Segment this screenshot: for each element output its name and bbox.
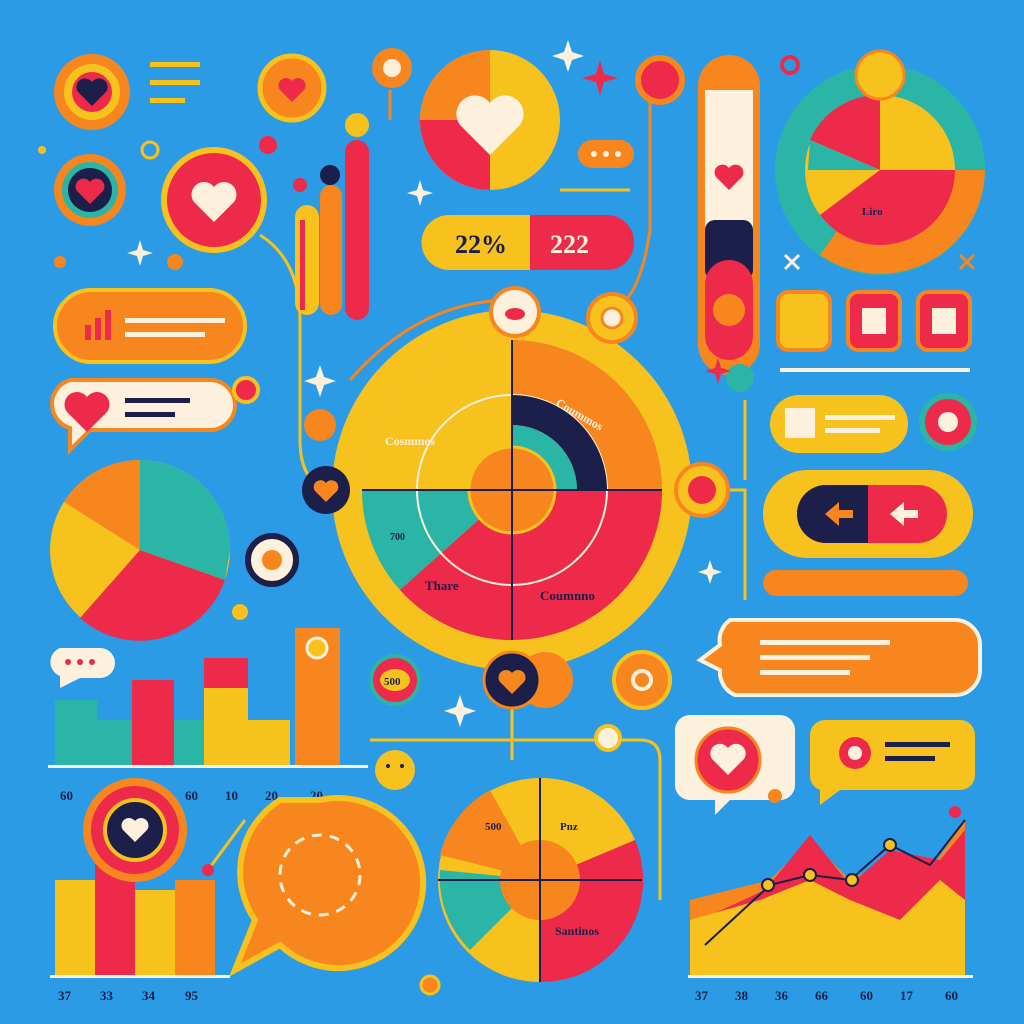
top small lips circle xyxy=(491,288,539,336)
bottom center pie xyxy=(438,778,643,982)
small heart top xyxy=(260,56,324,120)
left pie xyxy=(50,460,230,641)
bottom right area chart: 17 xyxy=(900,988,914,1003)
bottom center icons xyxy=(371,656,419,704)
percent pill: 222 xyxy=(550,230,589,259)
arrow button pill xyxy=(763,470,973,558)
bottom right area chart: 60 xyxy=(860,988,873,1003)
bar chart left middle: 20 xyxy=(265,788,278,803)
bar chart left middle: 60 xyxy=(60,788,73,803)
bottom right area chart xyxy=(688,806,973,1003)
big heart circle xyxy=(164,150,264,250)
heart bubble right xyxy=(675,715,795,815)
vertical bars xyxy=(295,113,369,320)
bottom right area chart: 36 xyxy=(775,988,788,1003)
bottom center icons: 500 xyxy=(384,676,401,688)
pill with image xyxy=(770,395,908,453)
top center pie xyxy=(420,50,560,190)
connector lines xyxy=(260,190,745,900)
bar chart left middle xyxy=(48,628,368,803)
top right donut: Liro xyxy=(862,206,883,218)
percent pill: 22% xyxy=(455,230,507,259)
center big donut: Cosmmos xyxy=(385,434,435,448)
percent pill xyxy=(422,215,634,270)
bottom center pie: Santinos xyxy=(555,924,599,938)
bottom-left chart: 34 xyxy=(142,988,156,1003)
bottom-left chart: 95 xyxy=(185,988,198,1003)
bar chart left middle: 10 xyxy=(225,788,238,803)
target heart xyxy=(54,154,126,226)
bottom center pie: Pnz xyxy=(560,821,578,833)
center big donut xyxy=(332,310,692,670)
bottom right area chart: 60 xyxy=(945,988,958,1003)
center big donut: 700 xyxy=(390,532,405,543)
bottom right area chart: 66 xyxy=(815,988,828,1003)
center big donut: Coumnno xyxy=(540,588,595,603)
center big donut: Coummos xyxy=(554,395,606,434)
bottom-left chart: 33 xyxy=(100,988,114,1003)
target small xyxy=(248,536,296,584)
bottom right area chart: 37 xyxy=(695,988,708,1003)
heart speech bubble left xyxy=(52,380,235,450)
bar chart left middle: 60 xyxy=(185,788,198,803)
center big donut: Thare xyxy=(425,578,459,593)
speech bubble right xyxy=(700,620,980,695)
top-left text lines xyxy=(150,62,200,103)
orange speech circle xyxy=(235,798,423,970)
orange pill left xyxy=(55,290,245,362)
left heart dot xyxy=(302,466,350,514)
bottom-left chart xyxy=(50,782,245,1003)
vertical capsule xyxy=(698,55,760,375)
top right donut xyxy=(775,51,985,275)
bottom right area chart: 38 xyxy=(735,988,748,1003)
icon buttons right xyxy=(778,292,970,350)
bottom-left chart: 37 xyxy=(58,988,72,1003)
orange ring top xyxy=(372,48,412,88)
bottom center pie: 500 xyxy=(485,821,502,833)
top-left heart badge xyxy=(54,54,130,130)
small pill dots xyxy=(578,140,634,168)
bar chart left middle: 20 xyxy=(310,788,323,803)
